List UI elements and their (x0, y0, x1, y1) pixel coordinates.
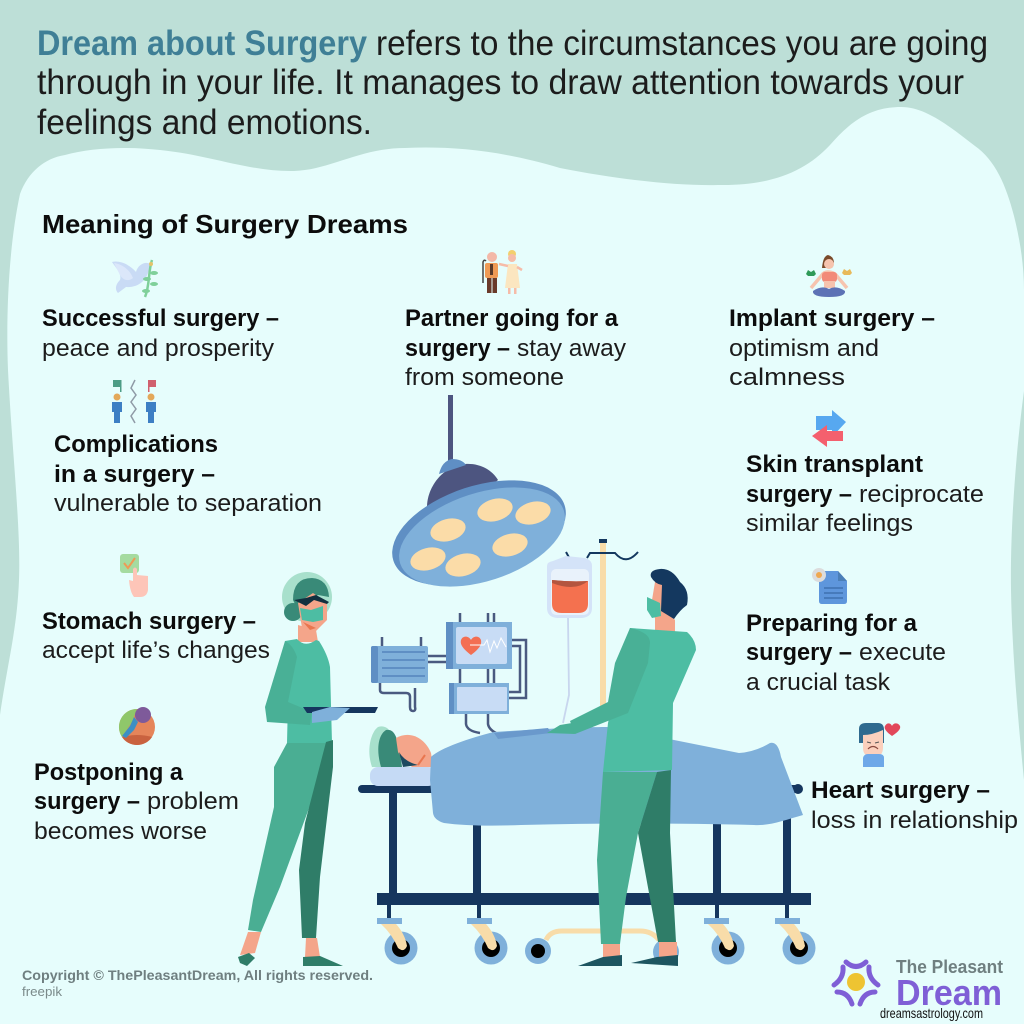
text: stomach surgery (42, 608, 270, 664)
text: preparing for a surgery: surgery – (746, 639, 852, 666)
text: skin transplant surgery: Skin transplant (746, 451, 923, 478)
text: preparing for a surgery (746, 610, 946, 696)
text: stomach surgery: accept life’s changes (42, 637, 270, 664)
text: postponing a surgery: surgery – (34, 788, 140, 815)
text: skin transplant surgery: similar feelings (746, 510, 913, 537)
icon: climber circle (119, 707, 155, 745)
illustration: monitors (371, 613, 526, 734)
text: partner going for a surgery: surgery – (405, 335, 510, 362)
text: stomach surgery: Stomach surgery – (42, 608, 256, 635)
text: preparing for a surgery: a crucial task (746, 669, 891, 696)
icon: sad face with heart (859, 723, 900, 767)
text: heart surgery: loss in relationship (811, 807, 1018, 834)
text: implant surgery: Implant surgery – (729, 305, 935, 332)
text: postponing a surgery: Postponing a (34, 759, 184, 786)
text: successful surgery (42, 305, 279, 362)
text: skin transplant surgery: reciprocate (859, 481, 984, 508)
heading intro text: Dream about Surgery (37, 24, 367, 63)
illustration: patient on pillow (369, 726, 436, 786)
text: complications in a surgery (54, 431, 322, 517)
text: heart surgery (811, 777, 1018, 834)
text: postponing a surgery (34, 759, 239, 845)
text: postponing a surgery: becomes worse (34, 818, 207, 845)
text: preparing for a surgery: Preparing for a (746, 610, 918, 637)
icon: document with star (812, 568, 847, 604)
icon: elderly couple (483, 250, 522, 294)
heading intro text: refers to the circumstances you are going (376, 24, 988, 63)
icon: two people with flags (112, 380, 156, 423)
heading intro text: through in your life. It manages to draw attention towards your (37, 63, 964, 102)
text: skin transplant surgery (746, 451, 984, 537)
logo: The Pleasant Dream (834, 957, 1003, 1013)
logo: The Pleasant Dream: Dream (896, 972, 1002, 1013)
text: partner going for a surgery: stay away (517, 335, 626, 362)
copyright (22, 968, 373, 999)
icon: swap arrows (812, 410, 846, 447)
section title: Meaning of Surgery Dreams (42, 209, 408, 239)
heading intro text (37, 24, 988, 142)
copyright: freepik (22, 984, 62, 999)
text: partner going for a surgery: Partner going for a (405, 305, 619, 332)
illustration: surgeon (547, 569, 696, 966)
text: heart surgery: Heart surgery – (811, 777, 990, 804)
text: preparing for a surgery: execute (859, 639, 946, 666)
illustration: blue sheet (430, 727, 803, 826)
illustration: nurse (238, 572, 378, 966)
text: skin transplant surgery: surgery – (746, 481, 852, 508)
text: partner going for a surgery (405, 305, 626, 391)
text: implant surgery: optimism and (729, 335, 879, 362)
text: complications in a surgery: Complications (54, 431, 218, 458)
text: postponing a surgery: problem (147, 788, 239, 815)
icon: dove (112, 260, 158, 297)
illustration: operating lamp (379, 395, 579, 606)
text: complications in a surgery: vulnerable to separation (54, 490, 322, 517)
heading intro text: feelings and emotions. (37, 103, 372, 142)
watermark: dreamsastrology.com (880, 1005, 983, 1021)
text: partner going for a surgery: from someone (405, 364, 564, 391)
icon: meditating woman (806, 255, 852, 297)
logo: The Pleasant Dream: The Pleasant (896, 957, 1003, 977)
illustration: stretcher frame and wheels (358, 784, 816, 965)
text: implant surgery: calmness (729, 364, 845, 391)
copyright: Copyright © ThePleasantDream, All rights reserved. (22, 968, 373, 983)
text: complications in a surgery: in a surgery – (54, 461, 215, 488)
text: successful surgery: peace and prosperity (42, 335, 274, 362)
text: successful surgery: Successful surgery – (42, 305, 279, 332)
text: implant surgery (729, 305, 935, 391)
illustration: IV stand and blood bag (547, 539, 638, 723)
icon: hand pressing check box (120, 554, 148, 597)
